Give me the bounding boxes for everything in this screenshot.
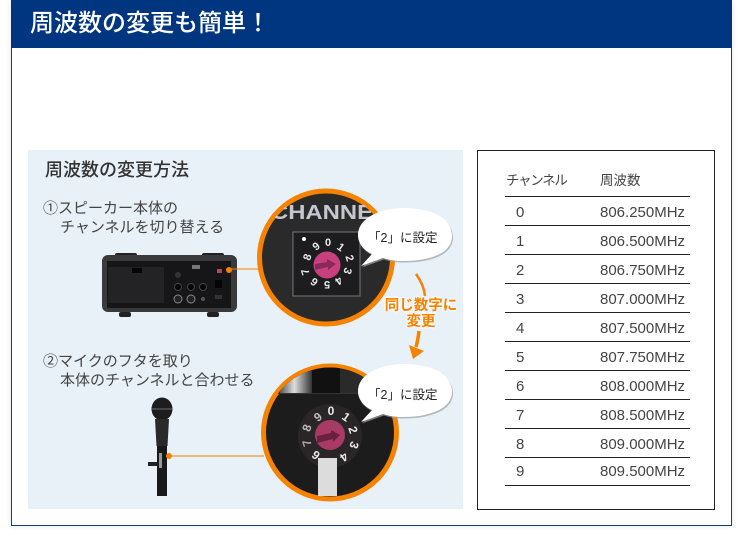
row 0: 806.250MHz — [600, 204, 685, 221]
arrow: same number — [409, 274, 425, 359]
icon: speaker — [102, 253, 237, 317]
row 5: 807.750MHz — [600, 349, 685, 366]
icon: speaker dial close-up: CHANNE — [271, 202, 373, 224]
row 5: 5 — [516, 349, 524, 366]
row 2 — [516, 262, 685, 279]
row 8: 8 — [516, 436, 524, 453]
connector: microphone to dial — [166, 453, 264, 459]
callout bubble 2 — [358, 364, 453, 424]
icon: microphone dial close-up: 1 — [339, 409, 353, 425]
step 1 text: ①スピーカー本体の — [43, 200, 178, 217]
icon: microphone dial close-up: 0 — [328, 404, 335, 418]
callout bubble 1 — [358, 208, 453, 268]
icon: speaker dial close-up: 0 — [325, 237, 331, 249]
icon: microphone — [148, 398, 172, 496]
panel heading: 周波数の変更方法 — [45, 160, 189, 180]
icon: microphone dial close-up: 4 — [337, 449, 351, 465]
panel: frequency table — [477, 150, 715, 510]
callout: same number: 同じ数字に — [385, 298, 457, 314]
row 3: 3 — [516, 291, 524, 308]
step 2 text: 本体のチャンネルと合わせる — [60, 372, 255, 389]
icon: microphone dial close-up: 8 — [299, 422, 315, 433]
step 2 text: ②マイクのフタを取り — [43, 353, 193, 370]
step 1 text — [43, 200, 224, 236]
row 1 — [516, 233, 685, 250]
step 2 text — [43, 353, 255, 389]
illustrations — [102, 188, 426, 502]
row 2: 806.750MHz — [600, 262, 685, 279]
icon: microphone dial close-up: 9 — [311, 409, 325, 425]
icon: speaker dial close-up: 6 — [309, 275, 321, 288]
row 3 — [516, 291, 685, 308]
row 6: 6 — [516, 378, 524, 395]
callout text 1: 「2」に設定 — [368, 231, 437, 245]
callout: same number: 変更 — [406, 314, 436, 330]
connector: speaker to dial — [226, 267, 262, 273]
icon: speaker dial close-up: 4 — [332, 274, 344, 287]
row 4: 4 — [516, 320, 524, 337]
icon: speaker dial close-up: 1 — [334, 241, 346, 254]
title: 周波数の変更も簡単！ — [30, 10, 270, 37]
step 1 text: チャンネルを切り替える — [60, 219, 224, 236]
icon: speaker dial close-up: 8 — [301, 253, 315, 262]
callout text 2: 「2」に設定 — [368, 388, 437, 402]
row 7: 808.500MHz — [600, 407, 685, 424]
row 8: 809.000MHz — [600, 436, 685, 453]
icon: speaker dial close-up: 2 — [342, 254, 356, 263]
icon: microphone dial close-up: 2 — [345, 425, 361, 436]
row 7: 7 — [516, 407, 524, 424]
table header: frequency: 周波数 — [600, 173, 640, 188]
table header: channel: チャンネル — [506, 173, 567, 188]
row 0: 0 — [516, 204, 524, 221]
row 1: 806.500MHz — [600, 233, 685, 250]
row 2: 2 — [516, 262, 524, 279]
row 9 — [516, 463, 685, 480]
row 1: 1 — [516, 233, 524, 250]
row 4: 807.500MHz — [600, 320, 685, 337]
icon: microphone dial close-up: 3 — [346, 440, 362, 451]
row 3: 807.000MHz — [600, 291, 685, 308]
icon: microphone dial close-up: 7 — [299, 437, 315, 448]
panel: how to change frequency — [28, 150, 463, 509]
title bar — [11, 0, 732, 48]
row 9: 809.500MHz — [600, 463, 685, 480]
row 5 — [516, 349, 685, 366]
icon: speaker dial close-up: 7 — [299, 267, 313, 276]
icon: speaker dial close-up: 3 — [340, 266, 354, 275]
callout: same number — [384, 294, 457, 330]
row 7 — [516, 407, 685, 424]
icon: microphone dial close-up — [262, 364, 398, 499]
icon: speaker dial close-up: 9 — [311, 240, 323, 253]
row 4 — [516, 320, 685, 337]
row 6 — [516, 378, 685, 395]
row 0 — [516, 204, 685, 221]
icon: microphone dial close-up: 6 — [309, 447, 323, 463]
icon: speaker dial close-up — [260, 191, 392, 324]
row 6: 808.000MHz — [600, 378, 685, 395]
row 8 — [516, 436, 685, 453]
row 9: 9 — [516, 463, 524, 480]
icon: speaker dial close-up: 5 — [324, 278, 330, 290]
